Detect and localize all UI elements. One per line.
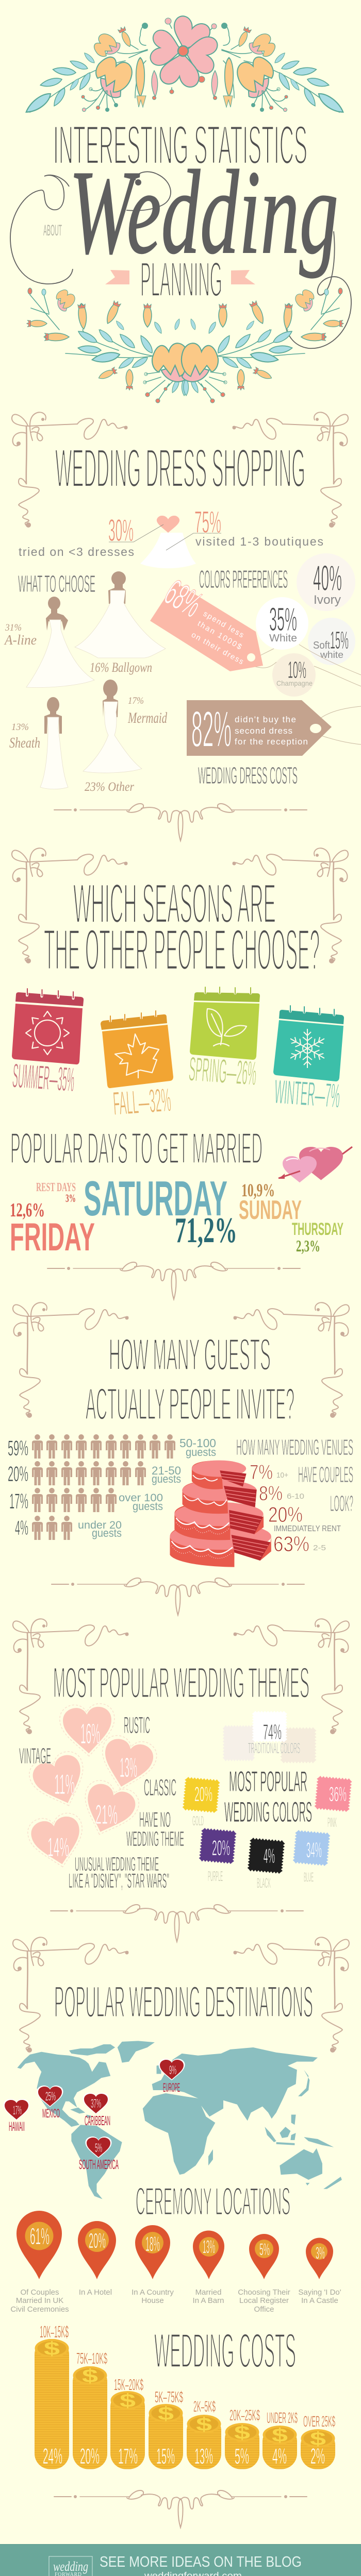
heart: unusual 14%: [25, 1810, 89, 1873]
label: unusual theme: [69, 1854, 169, 1892]
text: UNDER 2K$: [267, 2410, 298, 2427]
caption: barn: Married: [195, 2288, 221, 2297]
pin: europe 9%: [159, 2059, 185, 2095]
bubble: soft white: white: [320, 650, 343, 660]
location pin: 3%: 3%: [316, 2244, 325, 2262]
caption: uk civil ceremonies: Of Couples: [20, 2288, 59, 2297]
stat: thursday: 2,3%: [296, 1236, 320, 1255]
tag: 82% second dress: second dress: [235, 726, 292, 736]
coin stack: 20k-25k: $: [234, 2422, 250, 2443]
bubble: ivory: Ivory: [314, 593, 341, 607]
location pin: 18%: 18%: [145, 2233, 160, 2256]
caption: register office: Choosing Their: [238, 2288, 290, 2297]
ribbon right: [231, 270, 255, 284]
coin stack: 75k-10k: [73, 2349, 107, 2469]
pin: hawaii 17%: 17%: [13, 2104, 22, 2117]
swatch: black: 4%: [264, 1845, 275, 1868]
coin stack: 75k-10k: 20%: [80, 2444, 100, 2469]
venue stat: 8%: 6-10: [287, 1492, 304, 1501]
ribbon left: [105, 270, 129, 284]
heart: no theme 21%: [74, 1776, 143, 1844]
tag: 82% second dress: 82%: [191, 701, 232, 757]
text: 75K–10K$: [76, 2349, 107, 2367]
heart: classic 13%: 13%: [120, 1752, 137, 1783]
text: RUSTIC: [124, 1712, 150, 1738]
coin stack: 20k-25k: [225, 2407, 260, 2469]
venue stat: 20%: IMMEDIATELY RENT: [274, 1524, 341, 1533]
bubble: champagne: 10%: [288, 656, 306, 683]
caption: uk civil ceremonies: Civil Ceremonies: [10, 2305, 69, 2314]
text: 30%: [108, 513, 134, 548]
swatch: black: BLACK: [257, 1875, 271, 1891]
coin stack: over 25k: [301, 2413, 335, 2469]
bubble: soft white: [308, 618, 355, 665]
illustration: tiered cake: [170, 1460, 271, 1567]
caption: uk civil ceremonies: [10, 2288, 69, 2314]
text: 15K–20K$: [114, 2376, 143, 2394]
pin: mexico 25%: 25%: [45, 2090, 56, 2104]
stat: friday: 12,6%: [10, 1199, 45, 1221]
coin stack: 2k-5k: 13%: [194, 2444, 213, 2469]
caption: hotel: In A Hotel: [79, 2288, 112, 2297]
divider: [54, 804, 307, 841]
label: no wedding theme: [126, 1807, 184, 1851]
tag: 68% spend less: 68%: [158, 572, 209, 625]
caption: country house: In A Country: [132, 2288, 174, 2297]
floral wreath bottom: [27, 287, 343, 403]
swatch: black: [247, 1837, 285, 1891]
text: 20K–25K$: [229, 2407, 260, 2424]
tag: 68% spend less: spend less: [202, 609, 245, 639]
guest row: 50-100: [8, 1434, 216, 1460]
frame: themes section: [13, 1619, 349, 1734]
guest row: over 100: over 100: [119, 1492, 163, 1504]
tag: 82% second dress: [187, 700, 332, 757]
venue stat: 7%: 7%: [250, 1461, 273, 1484]
tag: 82% second dress: for the reception: [235, 737, 308, 747]
location pin: 20%: 20%: [89, 2229, 106, 2252]
caption: uk civil ceremonies: Married In UK: [16, 2296, 63, 2305]
label: sheath: 13%: [11, 722, 29, 733]
text: ABOUT: [43, 222, 62, 239]
label: a-line: [4, 622, 37, 648]
swatches: traditional colors: 74%: [263, 1720, 282, 1744]
footer headline: SEE MORE IDEAS ON THE BLOG: [100, 2554, 302, 2570]
guest row: 21-50: [8, 1461, 181, 1486]
bubble: white: [256, 597, 308, 650]
swatch: blue: 34%: [306, 1838, 322, 1862]
heart: vintage 11%: 11%: [54, 1768, 75, 1800]
heading: which seasons: [44, 872, 320, 982]
divider: [47, 1262, 300, 1299]
bubble: soft white: Soft: [313, 640, 330, 651]
swatch: blue: [292, 1829, 331, 1885]
label: sheath: [9, 722, 40, 751]
guest row: under 20: [15, 1516, 122, 1540]
text: HAVE NO: [139, 1807, 171, 1832]
pin: caribbean 37%: [83, 2093, 110, 2128]
pin: europe 9%: 9%: [169, 2063, 176, 2077]
coin stack: 75k-10k: $: [82, 2365, 98, 2386]
stat: 71.2%: 71,2%: [175, 1211, 237, 1250]
guest row: under 20: 4%: [15, 1517, 28, 1539]
coin stack: 5k-75k: [149, 2388, 183, 2469]
guest row: 21-50: 21-50: [152, 1464, 181, 1477]
stat: friday: FRIDAY: [10, 1215, 95, 1259]
swatches: traditional colors: [223, 1711, 317, 1764]
guest row: 21-50: guests: [152, 1472, 181, 1485]
illustration: ballgown: [75, 571, 166, 658]
text: SOUTH AMERICA: [79, 2157, 119, 2172]
pin: mexico 25%: [37, 2086, 63, 2121]
footer band: [0, 2544, 361, 2576]
coin stack: 15k-20k: $: [120, 2390, 136, 2411]
swatch: gold: GOLD: [192, 1813, 204, 1828]
bubble: white: 35%: [269, 601, 297, 638]
heart: rustic 16%: 16%: [80, 1717, 100, 1750]
swatch: purple: 20%: [212, 1836, 230, 1860]
frame: guests section: [13, 1302, 349, 1418]
caption: castle: [298, 2288, 341, 2305]
coin stack: under 2k: 4%: [272, 2444, 287, 2469]
label: mermaid: 17%: [128, 696, 144, 706]
frame: dress section: [12, 412, 348, 528]
coin stack: 5k-75k: 15%: [156, 2444, 175, 2469]
coin stack: 5k-75k: $: [158, 2403, 174, 2424]
icon: dress with heart bodice: [109, 516, 221, 568]
text: SUMMER—35%: [11, 1056, 76, 1098]
caption: register office: Office: [254, 2305, 274, 2314]
text: WHAT TO CHOOSE: [18, 570, 95, 597]
stat: sunday: [239, 1180, 302, 1225]
text: CARIBBEAN: [85, 2113, 110, 2128]
world map: [17, 2041, 342, 2199]
label: a-line: 31%: [5, 622, 22, 633]
price tag strings: [252, 645, 361, 744]
stat: rest days: REST DAYS: [36, 1181, 76, 1194]
guest row: 50-100: 59%: [8, 1436, 28, 1460]
tag: 82% second dress: didn't buy the: [235, 715, 296, 724]
coin stack: 15k-20k: [110, 2376, 145, 2469]
coin stack: under 2k: $: [272, 2425, 288, 2446]
caption: country house: [132, 2288, 174, 2305]
label: mermaid: Mermaid: [127, 709, 168, 726]
caption: castle: In A Castle: [301, 2296, 338, 2305]
caption: country house: House: [141, 2296, 164, 2305]
bubble: ivory: [297, 553, 355, 611]
icon: hearts with arrow: [278, 1147, 352, 1182]
swatch: blue: BLUE: [304, 1870, 314, 1885]
caption: barn: In A Barn: [193, 2296, 224, 2305]
frame: seasons section: [12, 848, 348, 963]
text: 10K–15K$: [40, 2323, 69, 2341]
text: EUROPE: [163, 2081, 180, 2095]
illustration: mermaid: [83, 680, 142, 773]
tag: 68% spend less: [150, 572, 263, 671]
text: WEDDING THEME: [126, 1827, 184, 1851]
venue stat: 8%: 8%: [259, 1482, 283, 1505]
venue stat: 7%: 10+: [276, 1471, 288, 1480]
coin stack: 2k-5k: 2K–5K$: [193, 2398, 216, 2415]
illustration: sheath: [40, 697, 68, 789]
swatch: gold: [182, 1776, 220, 1828]
stat: sunday: 10,9%: [241, 1180, 275, 1200]
location pin: 18%: [135, 2225, 170, 2279]
location pin: 13%: [193, 2230, 224, 2279]
label: other: 23% Other: [85, 780, 134, 794]
text: VINTAGE: [19, 1743, 51, 1769]
location pin: 5%: 5%: [259, 2240, 270, 2259]
stat: sunday: SUNDAY: [239, 1195, 302, 1225]
text: HAWAII: [9, 2120, 25, 2134]
pin: south america 5%: [79, 2137, 119, 2172]
venue stat: 8%: [259, 1482, 304, 1505]
coin stack: 2k-5k: $: [196, 2414, 212, 2435]
stat: thursday: [292, 1219, 343, 1255]
location pin: 20%: [78, 2221, 116, 2279]
coin stack: 10k-15k: [35, 2323, 69, 2469]
tag: 68% spend less: than 1000$: [196, 619, 243, 652]
swatch: gold: 20%: [194, 1783, 212, 1806]
illustration: a-line dress: [26, 597, 94, 687]
location pin: 13%: 13%: [203, 2237, 215, 2257]
coin stack: 10k-15k: $: [44, 2338, 60, 2359]
label: sheath: Sheath: [9, 735, 40, 751]
venue stat: 63%: 63%: [273, 1532, 309, 1556]
heading: most popular wedding colors: [224, 1765, 312, 1828]
guest row: over 100: [9, 1488, 163, 1513]
coin stack: under 2k: [262, 2410, 298, 2469]
bubble: champagne: [272, 653, 316, 697]
pin: south america 5%: 5%: [95, 2141, 102, 2155]
stat: rest days: 3%: [65, 1192, 76, 1205]
caption: castle: Saying 'I Do': [298, 2288, 341, 2297]
text: MEXICO: [42, 2107, 60, 2121]
label: a-line: A-line: [4, 632, 37, 648]
text: 5K–75K$: [155, 2388, 183, 2406]
calendar: spring: [190, 987, 260, 1060]
stat: friday: [10, 1199, 95, 1259]
label: mermaid: [127, 696, 168, 726]
swatch: pink: PINK: [327, 1815, 337, 1830]
calendar: winter: [273, 1006, 344, 1081]
logo: wedding forward: [49, 2556, 92, 2576]
divider: [54, 2490, 307, 2528]
text: FALL—32%: [112, 1081, 172, 1122]
pin: caribbean 37%: 37%: [91, 2097, 101, 2111]
logo: wedding forward: wedding: [53, 2559, 88, 2574]
label: ballgown: 16% Ballgown: [90, 660, 152, 675]
divider: [51, 1905, 303, 1942]
heart: unusual 14%: 14%: [47, 1833, 69, 1862]
stat: saturday: SATURDAY: [84, 1171, 227, 1226]
title: wedding script: [10, 146, 351, 348]
location pin: 61%: [17, 2211, 62, 2279]
calendar: fall: [101, 1011, 173, 1088]
swatch: pink: [314, 1775, 352, 1830]
heart: no theme 21%: 21%: [95, 1800, 118, 1830]
guest row: under 20: guests: [92, 1527, 122, 1539]
text: CLASSIC: [144, 1774, 176, 1801]
bubble: champagne: Champagne: [276, 679, 313, 687]
coin stack: 2k-5k: [187, 2398, 221, 2469]
guest row: under 20: under 20: [78, 1519, 122, 1531]
venue stat: 20%: [268, 1502, 341, 1533]
text: UNUSUAL WEDDING THEME: [75, 1854, 159, 1875]
guest row: 21-50: 20%: [8, 1462, 28, 1486]
venue stat: 20%: 20%: [268, 1502, 303, 1527]
guest row: over 100: guests: [133, 1500, 163, 1513]
swatch: purple: PURPLE: [208, 1868, 223, 1884]
coin stack: 15k-20k: 17%: [118, 2444, 138, 2469]
label: tried dresses: tried on <3 dresses: [19, 545, 134, 558]
venue stat: 63%: 2-5: [313, 1544, 326, 1552]
stat: rest days: [36, 1181, 76, 1205]
caption: register office: [238, 2288, 290, 2314]
tag: 68% spend less: on their dress: [190, 631, 245, 666]
divider: [52, 1578, 304, 1615]
bubble: white: White: [269, 633, 297, 644]
heading: how many guests: [86, 1330, 294, 1429]
guest row: 50-100: 50-100: [179, 1436, 216, 1450]
calendar: summer: [12, 989, 84, 1064]
text: 75%: [194, 505, 221, 539]
pin: hawaii 17%: [3, 2099, 30, 2134]
coin stack: over 25k: $: [310, 2428, 326, 2449]
coin stack: 10k-15k: 24%: [43, 2444, 62, 2469]
swatch: purple: [199, 1827, 237, 1884]
label: visited boutiques: visited 1-3 boutiques: [195, 535, 323, 548]
location pin: 5%: [249, 2234, 279, 2279]
caption: barn: [193, 2288, 224, 2305]
frame: destinations section: [13, 1937, 349, 2053]
floral wreath top: [24, 13, 346, 116]
location pin: 61%: 61%: [30, 2223, 50, 2249]
coin stack: 20k-25k: 5%: [235, 2444, 249, 2469]
heart: vintage 11%: [25, 1748, 94, 1815]
heading: how many venues: [236, 1435, 353, 1516]
heart: classic 13%: [94, 1733, 160, 1796]
caption: register office: Local Register: [239, 2296, 289, 2305]
guest row: over 100: 17%: [9, 1489, 28, 1513]
guest row: 50-100: guests: [186, 1446, 216, 1459]
heart: rustic 16%: [59, 1703, 117, 1757]
coin stack: over 25k: 2%: [310, 2444, 325, 2469]
location pin: 3%: [306, 2238, 333, 2279]
